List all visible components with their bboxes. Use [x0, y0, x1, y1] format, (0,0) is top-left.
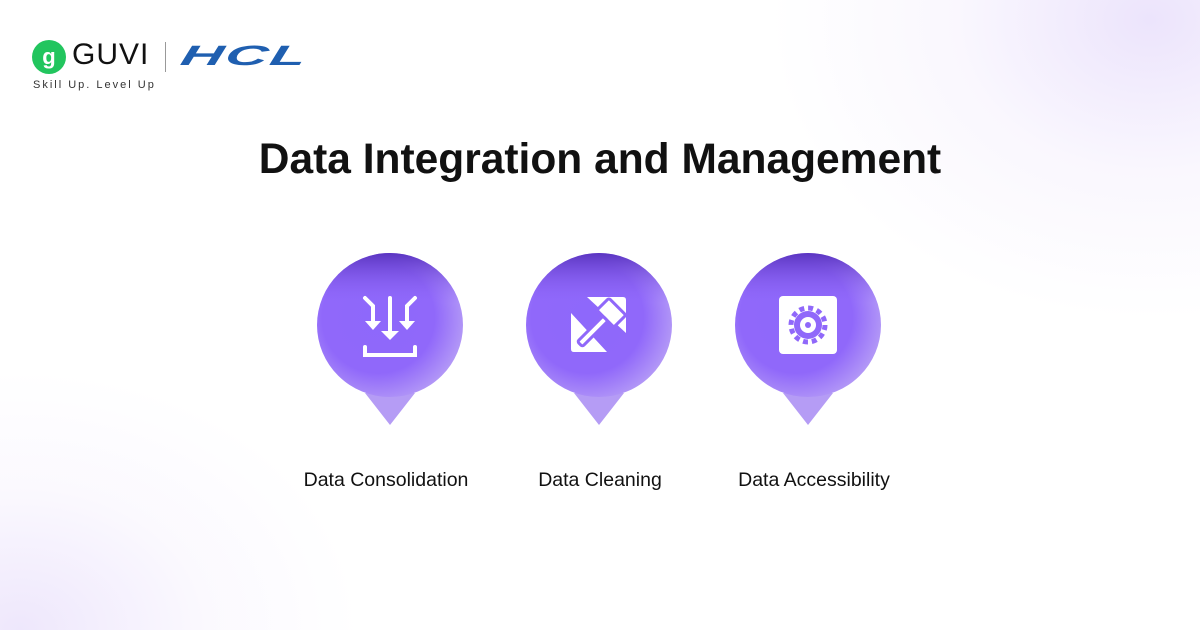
tagline: Skill Up. Level Up — [33, 79, 156, 91]
logo — [32, 38, 312, 91]
bubble 1: consolidation — [317, 253, 463, 425]
bubble 3: accessibility — [735, 253, 881, 425]
label: consolidation: Data Consolidation — [304, 469, 468, 491]
icon: guvi — [32, 40, 66, 74]
bubble 2: cleaning — [526, 253, 672, 425]
guvi wordmark: GUVI — [72, 38, 149, 71]
label: accessibility: Data Accessibility — [738, 469, 890, 491]
icon: guvi: g — [42, 44, 56, 69]
title: Data Integration and Management — [259, 136, 941, 183]
hcl wordmark: HCL — [178, 40, 312, 71]
label: cleaning: Data Cleaning — [538, 469, 662, 491]
